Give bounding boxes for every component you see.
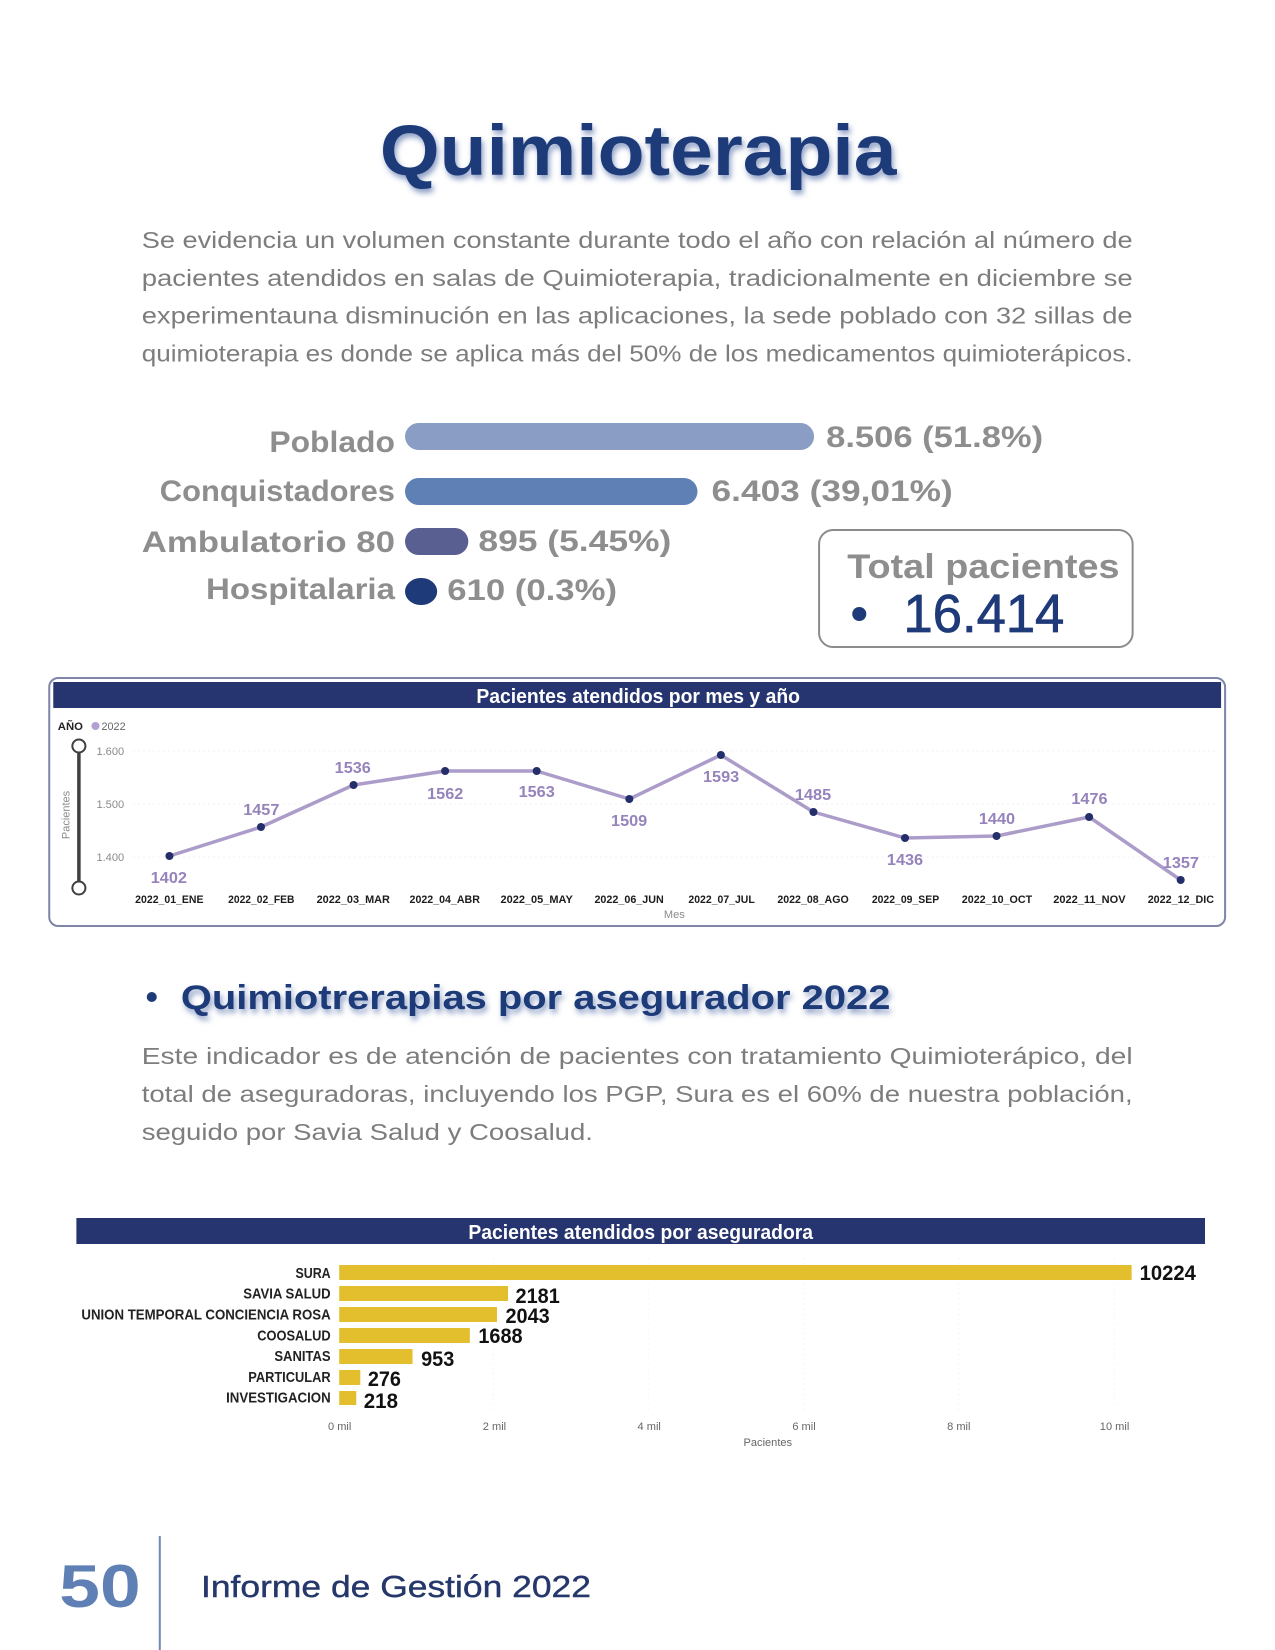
y axis ticks: 1.500 — [96, 799, 124, 811]
category labels — [81, 1266, 331, 1406]
slider — [72, 740, 85, 894]
data labels: 1457 — [243, 801, 279, 819]
bar: Ambulatorio 80: 895 (5.45%) — [478, 525, 671, 558]
bar: Hospitalaria: Hospitalaria — [206, 573, 395, 606]
y axis ticks — [96, 746, 1218, 864]
value labels: 1688 — [478, 1325, 523, 1348]
x axis labels: 2022_10_OCT — [962, 894, 1032, 906]
x axis labels: 2022_04_ABR — [410, 894, 481, 906]
x axis labels: 2022_02_FEB — [228, 894, 294, 906]
intro paragraph: Se evidencia un volumen constante durante todo el año con relación al número de — [142, 227, 1133, 253]
bar: Poblado — [269, 421, 1043, 459]
category labels: INVESTIGACION — [226, 1391, 331, 1406]
category labels: SANITAS — [274, 1349, 331, 1365]
insurer paragraph — [142, 1043, 1133, 1145]
x axis labels: 2022_01_ENE — [135, 894, 204, 906]
category labels: PARTICULAR — [248, 1370, 331, 1386]
insurer paragraph: seguido por Savia Salud y Coosalud. — [142, 1119, 593, 1145]
value labels: 276 — [368, 1368, 401, 1391]
x axis labels: 2022_11_NOV — [1053, 894, 1126, 906]
data labels: 1562 — [427, 785, 463, 803]
bar: Conquistadores: 6.403 (39,01%) — [712, 475, 953, 508]
insurer paragraph: Este indicador es de atención de pacientes con tratamiento Quimioterápico, del — [142, 1043, 1133, 1069]
x axis labels: 2022_09_SEP — [872, 894, 939, 906]
data labels: 1402 — [151, 869, 187, 887]
title: Quimioterapia — [380, 112, 898, 191]
data labels: 1593 — [703, 768, 739, 786]
bar: Poblado: 8.506 (51.8%) — [826, 421, 1043, 454]
data labels: 1476 — [1071, 790, 1108, 808]
x axis labels: 2022_12_DIC — [1148, 894, 1214, 906]
category labels: SAVIA SALUD — [243, 1287, 331, 1302]
x axis labels: 2022_06_JUN — [594, 894, 664, 906]
x axis labels: 2022_07_JUL — [688, 894, 755, 906]
legend: AÑO — [58, 720, 83, 733]
data labels: 1440 — [979, 810, 1015, 828]
x axis title: Pacientes — [744, 1437, 793, 1449]
panel: patients per month line chart — [49, 678, 1225, 926]
value labels: 2043 — [506, 1305, 550, 1328]
intro paragraph: pacientes atendidos en salas de Quimioterapia, tradicionalmente en diciembre se — [142, 265, 1133, 291]
chart header — [53, 682, 1221, 708]
x axis title: Mes — [664, 909, 685, 921]
bar: Poblado: Poblado — [269, 426, 395, 459]
footer — [59, 1536, 591, 1650]
x axis labels: 2022_08_AGO — [777, 894, 849, 906]
category labels: UNION TEMPORAL CONCIENCIA ROSA — [81, 1308, 331, 1323]
value labels: 10224 — [1140, 1262, 1196, 1285]
value labels: 2181 — [516, 1285, 560, 1308]
bar: Conquistadores — [160, 475, 953, 508]
panel: patients per insurer bar chart — [76, 1218, 1205, 1449]
total patients box: Total pacientes — [847, 548, 1120, 586]
category labels: COOSALUD — [257, 1329, 331, 1344]
bar: Ambulatorio 80 — [142, 525, 671, 559]
x axis ticks: 2 mil — [483, 1421, 506, 1433]
y axis ticks: 1.600 — [96, 746, 124, 758]
chart header: Pacientes atendidos por aseguradora — [468, 1222, 814, 1244]
legend — [58, 720, 126, 733]
chart: patients by site — [142, 421, 1043, 607]
x axis ticks: 6 mil — [792, 1421, 816, 1433]
data points — [165, 751, 1185, 884]
bar: Ambulatorio 80: Ambulatorio 80 — [142, 526, 395, 559]
legend: 2022 — [102, 721, 126, 733]
x axis labels: 2022_05_MAY — [500, 894, 573, 906]
bars — [339, 1265, 1132, 1405]
x axis ticks — [328, 1421, 1129, 1433]
subheading: Quimiotrerapias por asegurador 2022 — [181, 979, 890, 1017]
x axis ticks: 4 mil — [638, 1421, 661, 1433]
data labels: 1536 — [335, 759, 371, 777]
page number: 50 — [59, 1553, 141, 1620]
line series — [169, 755, 1181, 880]
report name: Informe de Gestión 2022 — [201, 1569, 591, 1604]
data labels: 1357 — [1163, 854, 1199, 872]
data labels: 1509 — [611, 812, 647, 830]
y axis title: Pacientes — [60, 790, 72, 839]
bar: Conquistadores: Conquistadores — [160, 475, 395, 508]
x axis ticks: 8 mil — [947, 1421, 970, 1433]
total patients box — [819, 530, 1133, 647]
x axis ticks: 0 mil — [328, 1421, 351, 1433]
total patients box: 16.414 — [903, 584, 1064, 644]
value labels: 953 — [421, 1348, 454, 1371]
data labels: 1485 — [795, 786, 831, 804]
x axis labels: 2022_03_MAR — [317, 894, 391, 906]
data labels: 1436 — [887, 851, 923, 869]
data labels: 1563 — [519, 783, 555, 801]
intro paragraph: experimentauna disminución en las aplicaciones, la sede poblado con 32 sillas de — [142, 303, 1133, 328]
intro paragraph: quimioterapia es donde se aplica más del 50% de los medicamentos quimioterápicos. — [142, 341, 1133, 366]
value labels: 218 — [364, 1390, 398, 1413]
bar: Hospitalaria — [206, 573, 617, 607]
chart header — [76, 1218, 1205, 1244]
insurer paragraph: total de aseguradoras, incluyendo los PGP, Sura es el 60% de nuestra población, — [142, 1081, 1133, 1107]
intro paragraph — [142, 227, 1133, 366]
x axis ticks: 10 mil — [1100, 1421, 1129, 1433]
value labels — [364, 1262, 1196, 1413]
y axis ticks: 1.400 — [96, 852, 124, 864]
x axis labels — [135, 894, 1214, 906]
bar: Hospitalaria: 610 (0.3%) — [447, 574, 617, 607]
category labels: SURA — [295, 1266, 331, 1282]
data labels — [151, 759, 1199, 887]
chart header: Pacientes atendidos por mes y año — [476, 686, 800, 708]
